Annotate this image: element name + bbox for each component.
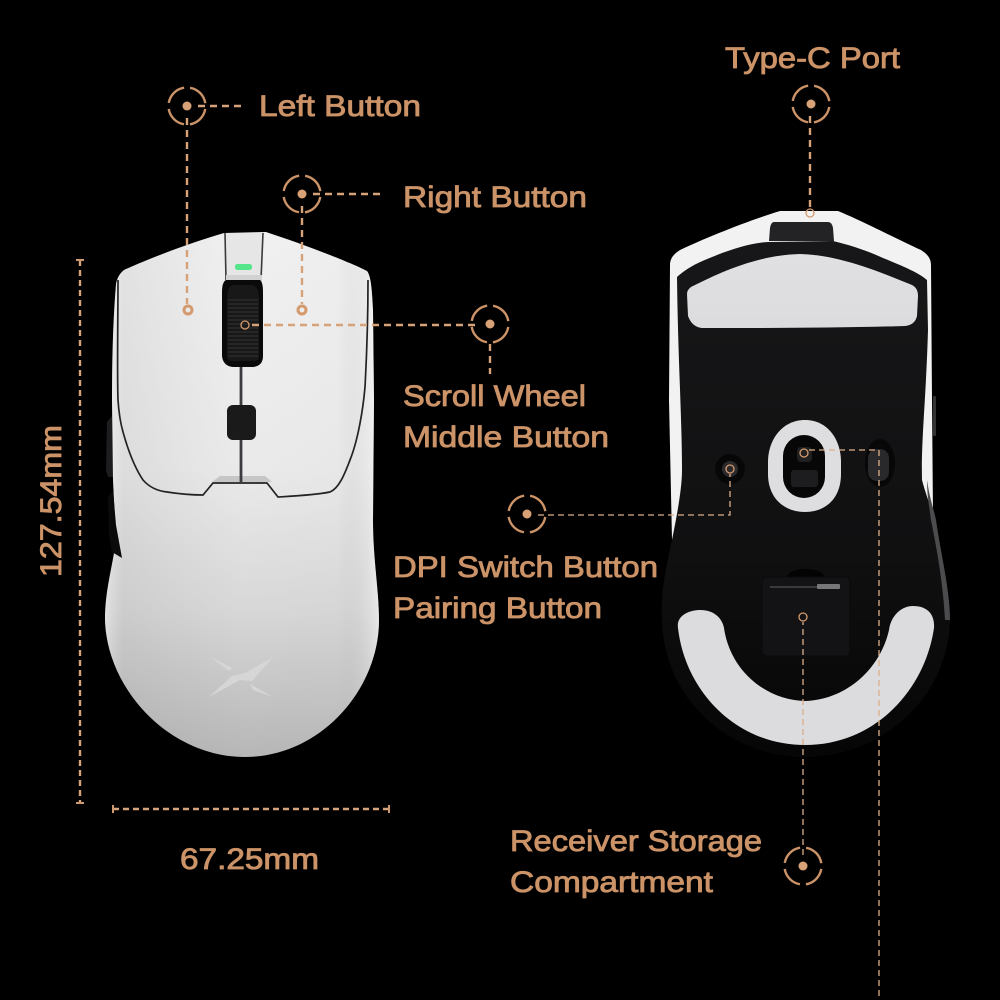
DPI button — [227, 405, 256, 440]
label: height: 127.54mm — [35, 425, 68, 577]
height dimension — [35, 260, 84, 803]
callout: pairing button leader — [800, 449, 879, 1000]
callout: right button — [284, 176, 587, 314]
mouse shell — [105, 232, 379, 757]
receiver compartment — [762, 569, 850, 656]
label: type-c port: Type-C Port — [725, 42, 900, 75]
label: compartment: Compartment — [510, 866, 713, 899]
top glide pad — [687, 254, 918, 328]
callout: left button — [168, 88, 421, 314]
label: right button: Right Button — [403, 181, 587, 214]
white shell — [669, 211, 933, 600]
label: pairing button: Pairing Button — [393, 592, 602, 625]
bottom view mouse — [662, 211, 950, 757]
label: scroll wheel: Scroll Wheel — [403, 380, 586, 413]
sensor ring — [768, 420, 841, 512]
Type-C port — [769, 222, 834, 241]
label: DPI switch button: DPI Switch Button — [393, 551, 658, 584]
width dimension — [113, 805, 389, 876]
label: left button: Left Button — [259, 90, 421, 123]
bottom glide pad — [678, 606, 934, 745]
side button front — [106, 416, 113, 477]
shell seam lines — [118, 280, 368, 497]
callout: DPI switch button — [393, 465, 734, 625]
top view mouse — [105, 232, 379, 757]
logo embossed — [209, 656, 273, 697]
label: middle button: Middle Button — [403, 421, 609, 454]
centre seam — [240, 366, 242, 483]
callout: type-c port — [725, 42, 900, 217]
side bump — [933, 396, 936, 436]
scroll wheel — [222, 280, 263, 367]
side button rear wedge — [108, 490, 122, 558]
pairing button — [865, 439, 895, 487]
DPI indicator panel — [225, 233, 263, 282]
callout: scroll wheel — [241, 306, 609, 454]
DPI switch button — [715, 454, 745, 484]
label: receiver storage: Receiver Storage — [510, 825, 762, 858]
callout: receiver storage — [510, 613, 822, 899]
right edge highlight — [927, 480, 950, 620]
black underside — [662, 241, 950, 757]
label: width: 67.25mm — [180, 843, 319, 876]
rear notch — [212, 476, 272, 482]
